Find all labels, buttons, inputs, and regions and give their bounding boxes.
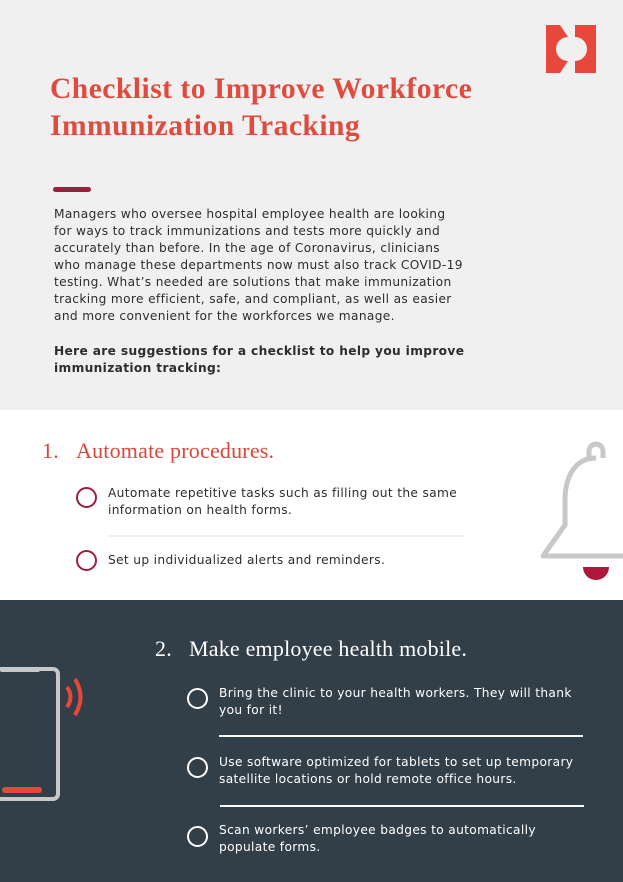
- item 3: Scan workers’ employee badges to automatically populate forms.: [219, 823, 536, 854]
- icon: tablet: [0, 667, 82, 801]
- intro text: Managers who oversee hospital employee health are looking: [54, 207, 445, 221]
- intro text: for ways to track immunizations and tests more quickly and accurately than before. In the age of Coronavirus, clinicians who manage these departments now must also track COVID-19 testing. What’s needed are solutions that make immunization tracking more efficient, safe, and compliant, as well as easier and more convenient for the workforces we manage.: [54, 224, 463, 323]
- heading 1: 1. Automate procedures.: [42, 438, 274, 463]
- bold lead-in: Here are suggestions for a checklist to help you improve immunization tracking:: [54, 344, 464, 375]
- panel: section 1: [0, 410, 623, 600]
- icon: bell: [540, 442, 623, 580]
- title: Checklist to Improve Workforce: [50, 73, 472, 105]
- title: [50, 73, 472, 142]
- item 2: Use software optimized for tablets to set up temporary satellite locations or hold remote office hours.: [219, 755, 573, 786]
- item 2: Set up individualized alerts and reminders.: [108, 553, 385, 567]
- item 1: Automate repetitive tasks such as filling out the same information on health forms.: [108, 486, 457, 517]
- item 2: [76, 550, 385, 571]
- logo: [546, 25, 596, 73]
- header panel: [0, 0, 623, 410]
- item 1: Bring the clinic to your health workers. They will thank you for it!: [219, 686, 572, 717]
- panel: section 2: [0, 600, 623, 882]
- heading 2: 2. Make employee health mobile.: [155, 636, 467, 661]
- title: Immunization Tracking: [50, 110, 360, 142]
- accent bar: [53, 187, 91, 192]
